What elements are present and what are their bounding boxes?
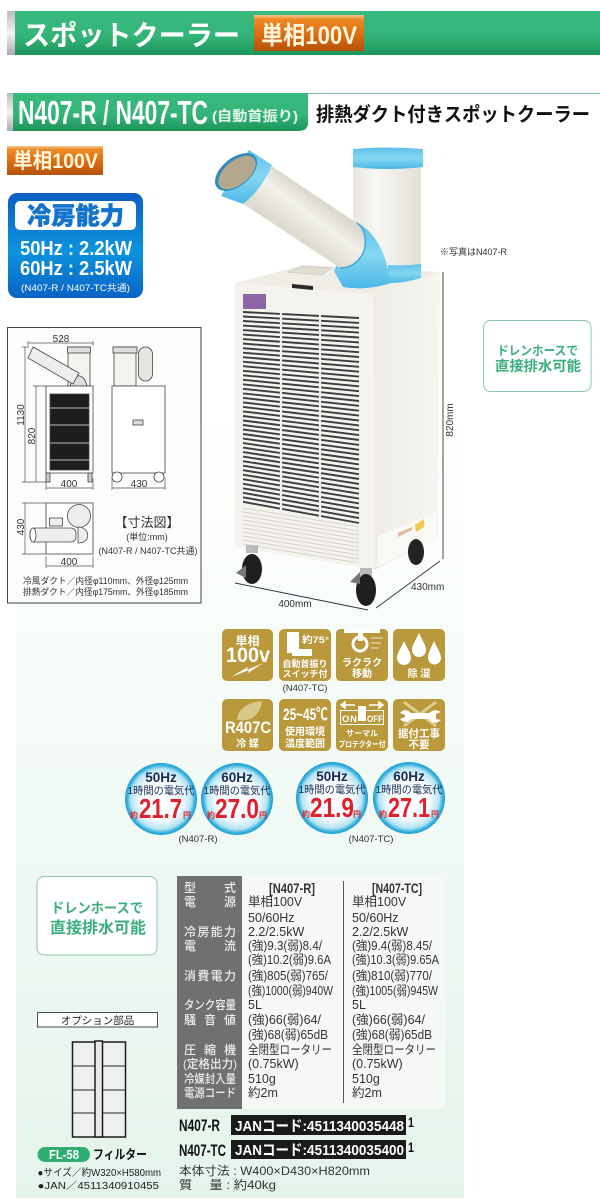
- icon: dehumidify: [393, 629, 445, 681]
- electricity cost: N407-R 50Hz: 1時間の電気代: [128, 784, 195, 797]
- icon: temperature range: [279, 699, 331, 751]
- spec values N407-R: (強)68(弱)65dB: [248, 1028, 328, 1042]
- spec table: [177, 876, 445, 1109]
- callout: drain hose top: ドレンホースで: [497, 344, 578, 358]
- spec labels: 圧縮機: [184, 1042, 236, 1057]
- spec values N407-R: 全閉型ロータリー: [248, 1043, 332, 1057]
- dimension labels: 820mm: [445, 403, 456, 437]
- spec values N407-R: 2.2/2.5kW: [248, 925, 304, 939]
- spec values N407-R: (強)1000(弱)940W: [248, 984, 333, 998]
- capacity 60Hz: 60Hz : 2.5kW: [20, 258, 132, 280]
- electricity cost: N407-R 50Hz: 円: [183, 811, 191, 820]
- JAN code: N407-R: [179, 1114, 414, 1135]
- icon: no installation work: 据付工事: [398, 727, 440, 740]
- icon: temperature range: 温度範囲: [285, 737, 325, 750]
- spec values N407-R: (0.75kW): [248, 1057, 299, 1071]
- filter name: [38, 1147, 147, 1162]
- spec labels: タンク容量: [184, 997, 236, 1012]
- drawing caption: (単位:mm): [126, 531, 168, 542]
- spec labels: (定格出力): [183, 1056, 237, 1071]
- dimension numbers: [16, 334, 148, 568]
- option heading: オプション部品: [61, 1015, 134, 1027]
- icon: auto swing switch: [279, 629, 331, 681]
- model note: auto swing: (自動首振り): [212, 108, 298, 124]
- filter details: ●JAN／4511340910455: [38, 1180, 159, 1192]
- cold air hose: [208, 146, 365, 268]
- electricity cost: N407-TC 50Hz: 1時間の電気代: [298, 783, 366, 796]
- spec values N407-R: [N407-R]: [269, 880, 315, 896]
- spec values N407-TC: 全閉型ロータリー: [352, 1043, 436, 1057]
- drawing caption: [98, 515, 198, 556]
- JAN code: N407-R: 1: [408, 1114, 414, 1130]
- front view: [28, 347, 93, 482]
- icon: 100V: [222, 629, 273, 681]
- dimension arrows: [235, 272, 443, 610]
- spec values N407-TC: (強)10.3(弱)9.65A: [352, 953, 440, 967]
- duct sizes: [23, 575, 188, 597]
- model note R: (N407-R): [178, 834, 218, 845]
- icon: easy moving: 移動: [352, 667, 372, 680]
- electricity cost: N407-TC 60Hz: 1時間の電気代: [376, 783, 443, 796]
- spec values N407-TC: 単相100V: [352, 895, 407, 909]
- spec values N407-R: 約2m: [248, 1085, 278, 1100]
- spec values N407-R: 510g: [248, 1072, 276, 1086]
- electricity cost: N407-TC 60Hz: 約: [379, 809, 387, 819]
- spec values N407-R: 50/60Hz: [248, 911, 295, 925]
- icon: 100V: 単相: [235, 633, 260, 648]
- JAN code: N407-R: N407-R: [179, 1116, 220, 1135]
- electricity cost: N407-R 50Hz: 50Hz: [145, 770, 177, 785]
- dimension numbers: 820: [27, 427, 38, 444]
- photo note: ※写真はN407-R: [440, 246, 508, 257]
- spec labels: 冷房能力: [184, 924, 236, 939]
- body size and weight: 質 量 : 約40kg: [179, 1177, 276, 1192]
- spec values N407-TC: 5L: [352, 998, 366, 1012]
- spec labels: 電源: [184, 895, 236, 909]
- icon: auto swing switch: スイッチ付: [282, 668, 328, 679]
- panel: cooling capacity: [8, 193, 143, 298]
- spec values N407-TC: 50/60Hz: [352, 911, 399, 925]
- JAN code: N407-TC: 1: [408, 1139, 414, 1155]
- icon: dehumidify: 除 湿: [408, 667, 430, 680]
- electricity cost: N407-TC 50Hz: [296, 762, 368, 834]
- dimension numbers: 1130: [16, 404, 27, 426]
- tinted background panel: [16, 400, 464, 1198]
- capacity 50Hz: 50Hz : 2.2kW: [20, 238, 132, 260]
- icon: no installation work: 不要: [408, 739, 430, 751]
- icon: temperature range: 使用環境: [285, 725, 325, 738]
- spec values N407-R: (強)10.2(弱)9.6A: [248, 953, 332, 967]
- electricity cost: N407-R 50Hz: 約: [130, 810, 138, 820]
- spec values N407-TC: (強)66(弱)64/: [352, 1013, 426, 1027]
- product photo: spot cooler: [208, 146, 456, 610]
- spec values N407-TC: 510g: [352, 1072, 380, 1086]
- dimension labels: [278, 403, 456, 610]
- elbow: [334, 222, 391, 288]
- icon: temperature range: 25~45℃: [283, 705, 328, 724]
- drawing caption: 【寸法図】: [114, 515, 180, 530]
- lower louvers: [243, 508, 359, 563]
- body size and weight: 本体寸法 : W400×D430×H820mm: [179, 1164, 370, 1178]
- model names: N407-R / N407-TC: [18, 94, 208, 131]
- electricity cost: N407-R 60Hz: 27.0: [215, 793, 259, 824]
- electricity cost: N407-TC 50Hz: 50Hz: [316, 769, 348, 784]
- panel: dimension drawing: [8, 328, 201, 603]
- icon: easy moving: [336, 629, 388, 681]
- electricity cost: N407-R 60Hz: [201, 763, 273, 835]
- product subtitle: 排熱ダクト付きスポットクーラー: [316, 103, 590, 126]
- spec labels: 騒音値: [184, 1012, 236, 1027]
- spec values N407-TC: (強)68(弱)65dB: [352, 1028, 432, 1042]
- icon: thermal protector: OFF: [367, 714, 383, 725]
- spec values N407-R: (強)66(弱)64/: [248, 1013, 322, 1027]
- spec labels: 消費電力: [184, 968, 236, 983]
- side view: [112, 347, 165, 482]
- exhaust duct: [353, 148, 423, 283]
- model note TC: (N407-TC): [349, 834, 393, 845]
- spec labels: 型式: [184, 880, 236, 895]
- badge: single phase 100V small: 単相100V: [13, 150, 98, 173]
- icon: refrigerant R407C: [222, 699, 273, 751]
- icon: no installation work: [393, 699, 445, 751]
- electricity cost: N407-TC 50Hz: 円: [353, 810, 361, 819]
- spec values N407-R: [248, 880, 333, 1100]
- filter name: FL-58: [49, 1147, 79, 1162]
- spec values N407-TC: (強)1005(弱)945W: [352, 984, 438, 998]
- dimension numbers: 400: [61, 479, 78, 490]
- icon: auto swing switch: 約75°: [302, 634, 329, 646]
- heading: spot cooler: スポットクーラー: [23, 20, 240, 51]
- spec values N407-TC: [352, 880, 440, 1100]
- icon: 100V: 100v: [226, 644, 270, 667]
- JAN code: N407-R: JANコード:4511340035448: [235, 1118, 404, 1135]
- icon: easy moving: ラクラク: [342, 657, 382, 669]
- grille: [243, 310, 359, 528]
- filter details: [38, 1166, 161, 1192]
- dimension labels: 400mm: [278, 599, 312, 610]
- icon: thermal protector: [336, 699, 388, 751]
- icon: thermal protector: ON: [342, 714, 357, 725]
- dimension lines: [22, 341, 165, 568]
- spec values N407-TC: 2.2/2.5kW: [352, 925, 408, 939]
- dimension labels: 430mm: [411, 582, 444, 593]
- dimension numbers: 430: [131, 479, 148, 490]
- callout: drain hose top: [484, 320, 591, 392]
- spec values N407-TC: (0.75kW): [352, 1057, 403, 1071]
- filter name: フィルター: [93, 1147, 147, 1162]
- electricity cost: N407-TC 50Hz: 約: [302, 809, 310, 819]
- electricity cost: N407-TC 60Hz: 円: [431, 810, 439, 819]
- icon: auto swing switch: 自動首振り: [282, 658, 328, 669]
- top view: [30, 503, 93, 554]
- model heading bar: [7, 93, 600, 131]
- JAN code: N407-TC: [179, 1139, 414, 1160]
- spec labels: 冷媒封入量: [184, 1071, 236, 1086]
- callout: drain hose lower: ドレンホースで: [51, 900, 143, 916]
- drawing caption: (N407-R / N407-TC共通): [98, 546, 198, 556]
- unit body: [235, 265, 440, 570]
- electricity cost: N407-TC 60Hz: 27.1: [388, 792, 430, 823]
- electricity cost: N407-R 60Hz: 約: [207, 810, 215, 820]
- electricity cost: N407-R 60Hz: 円: [259, 811, 267, 820]
- body size and weight: [179, 1164, 370, 1192]
- electricity cost: N407-R 60Hz: 60Hz: [221, 770, 253, 785]
- capacity note: (N407-R / N407-TC共通): [21, 283, 130, 293]
- spec values N407-TC: (強)9.4(弱)8.45/: [352, 939, 432, 953]
- spec labels: [183, 880, 237, 1100]
- header bar: spot cooler: [7, 11, 600, 55]
- spec labels: 電流: [184, 939, 236, 953]
- electricity cost: N407-TC 60Hz: [373, 762, 445, 834]
- badge: single phase 100V: 単相100V: [261, 22, 357, 50]
- callout: drain hose top: 直接排水可能: [495, 358, 581, 374]
- icon: refrigerant R407C: 冷 媒: [236, 737, 259, 750]
- panel: optional parts: [38, 1012, 161, 1192]
- dimension numbers: 430: [16, 518, 27, 535]
- electricity cost: N407-R 60Hz: 1時間の電気代: [204, 784, 271, 797]
- icon: refrigerant R407C: R407C: [225, 718, 271, 737]
- duct sizes: 冷風ダクト／内径φ110mm、外径φ125mm: [23, 575, 188, 586]
- dimension numbers: 400: [61, 557, 78, 568]
- callout: drain hose lower: [37, 876, 157, 955]
- spec values N407-TC: [N407-TC]: [372, 880, 422, 896]
- spec values N407-TC: 約2m: [352, 1085, 382, 1100]
- JAN code: N407-TC: JANコード:4511340035400: [235, 1142, 404, 1159]
- callout: drain hose lower: 直接排水可能: [50, 918, 146, 937]
- icon note: (N407-TC): [283, 683, 327, 694]
- JAN code: N407-TC: N407-TC: [179, 1141, 226, 1160]
- spec labels: 電源コード: [184, 1086, 236, 1100]
- icon: thermal protector: サーマル: [346, 729, 378, 738]
- option heading: [38, 1012, 158, 1027]
- casters: [236, 539, 424, 606]
- icon: thermal protector: プロテクター付: [338, 739, 386, 749]
- electricity cost: N407-TC 50Hz: 21.9: [310, 792, 354, 823]
- spec values N407-R: (強)805(弱)765/: [248, 969, 328, 983]
- spec values N407-R: 5L: [248, 998, 262, 1012]
- filter image: [72, 1041, 126, 1137]
- capacity heading: 冷房能力: [27, 202, 124, 230]
- electricity cost: N407-R 50Hz: 21.7: [139, 793, 182, 824]
- spec values N407-R: 単相100V: [248, 895, 303, 909]
- dimension numbers: 528: [53, 334, 70, 345]
- spec values N407-R: (強)9.3(弱)8.4/: [248, 939, 322, 953]
- spec values N407-TC: (強)810(弱)770/: [352, 969, 432, 983]
- filter details: ●サイズ／約W320×H580mm: [38, 1166, 161, 1179]
- duct sizes: 排熱ダクト／内径φ175mm、外径φ185mm: [23, 586, 188, 597]
- electricity cost: N407-R 50Hz: [125, 763, 197, 835]
- purple label: [243, 294, 266, 309]
- electricity cost: N407-TC 60Hz: 60Hz: [393, 769, 425, 784]
